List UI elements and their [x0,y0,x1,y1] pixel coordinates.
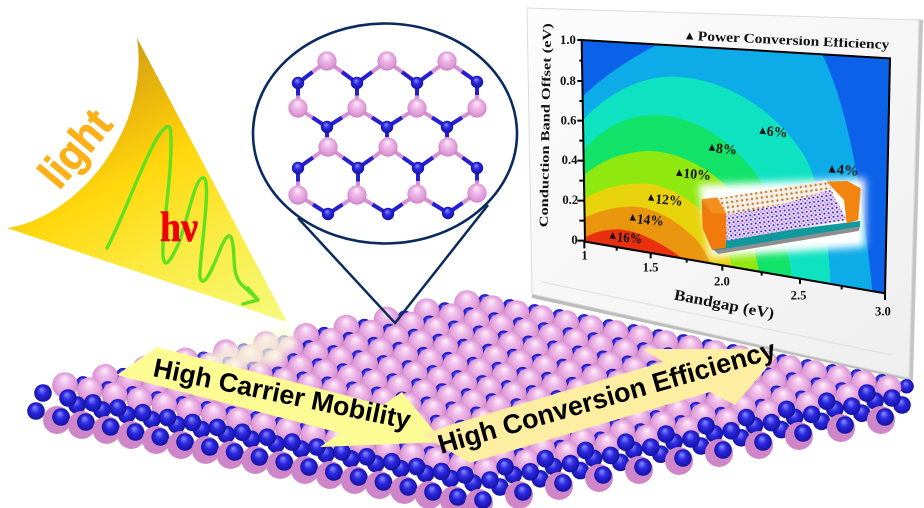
y axis title: Conduction Band Offset (eV) [537,23,554,227]
y axis tick labels: 0.6 [561,114,576,128]
label: high carrier mobility: High Carrier Mobility [151,352,414,435]
y axis tick labels: 0 [571,233,578,247]
label: light: light [29,100,122,197]
arrow: high carrier mobility [117,347,443,447]
chart: power conversion efficiency contour map [537,23,891,323]
data labels: 12% [655,192,683,210]
contour bands [582,40,890,295]
inset: nanosheet device [698,178,865,257]
x axis tick labels: 1.5 [643,261,658,275]
data labels: 16% [616,230,643,248]
honeycomb bonds [298,61,477,214]
device right electrode [827,181,861,223]
icon: green photon wave arrow [107,127,258,304]
y axis tick labels: 0.4 [562,153,578,167]
data labels: 6% [766,124,788,141]
device left electrode [702,197,726,250]
arrow: high conversion efficiency [422,349,775,463]
data labels [610,124,859,248]
pink atoms [288,51,487,205]
x axis tick labels: 2.0 [714,275,730,289]
y axis tick labels: 1.0 [560,33,576,47]
label: high conversion efficiency: High Conversion Efficiency [434,334,779,460]
plot frame and ticks [577,40,890,300]
device substrate [713,227,860,254]
chart legend title: Power Conversion Efficiency [698,28,890,52]
y axis tick labels: 0.2 [562,193,578,207]
device atoms [718,180,847,241]
x axis title: Bandgap (eV) [673,287,776,323]
x axis tick labels: 2.5 [791,289,806,303]
y axis tick labels [560,33,578,247]
y axis tick labels: 0.8 [560,74,576,88]
x axis tick labels: 1 [581,248,588,262]
blue atoms [292,76,483,220]
faded beam over sheet [198,326,296,372]
panel: tilted chart slide [527,8,923,381]
data labels: 4% [836,162,859,180]
atomic sheet [27,290,914,508]
x axis tick labels: 3.0 [875,305,891,319]
data labels: 14% [636,212,664,230]
x axis tick labels [581,248,891,319]
label: h nu: hν [160,205,198,251]
data labels: 10% [683,167,712,184]
lens: zoomed atomic structure callout [253,24,517,323]
icon: light beam wedge [7,38,287,322]
data labels: 8% [715,142,738,158]
